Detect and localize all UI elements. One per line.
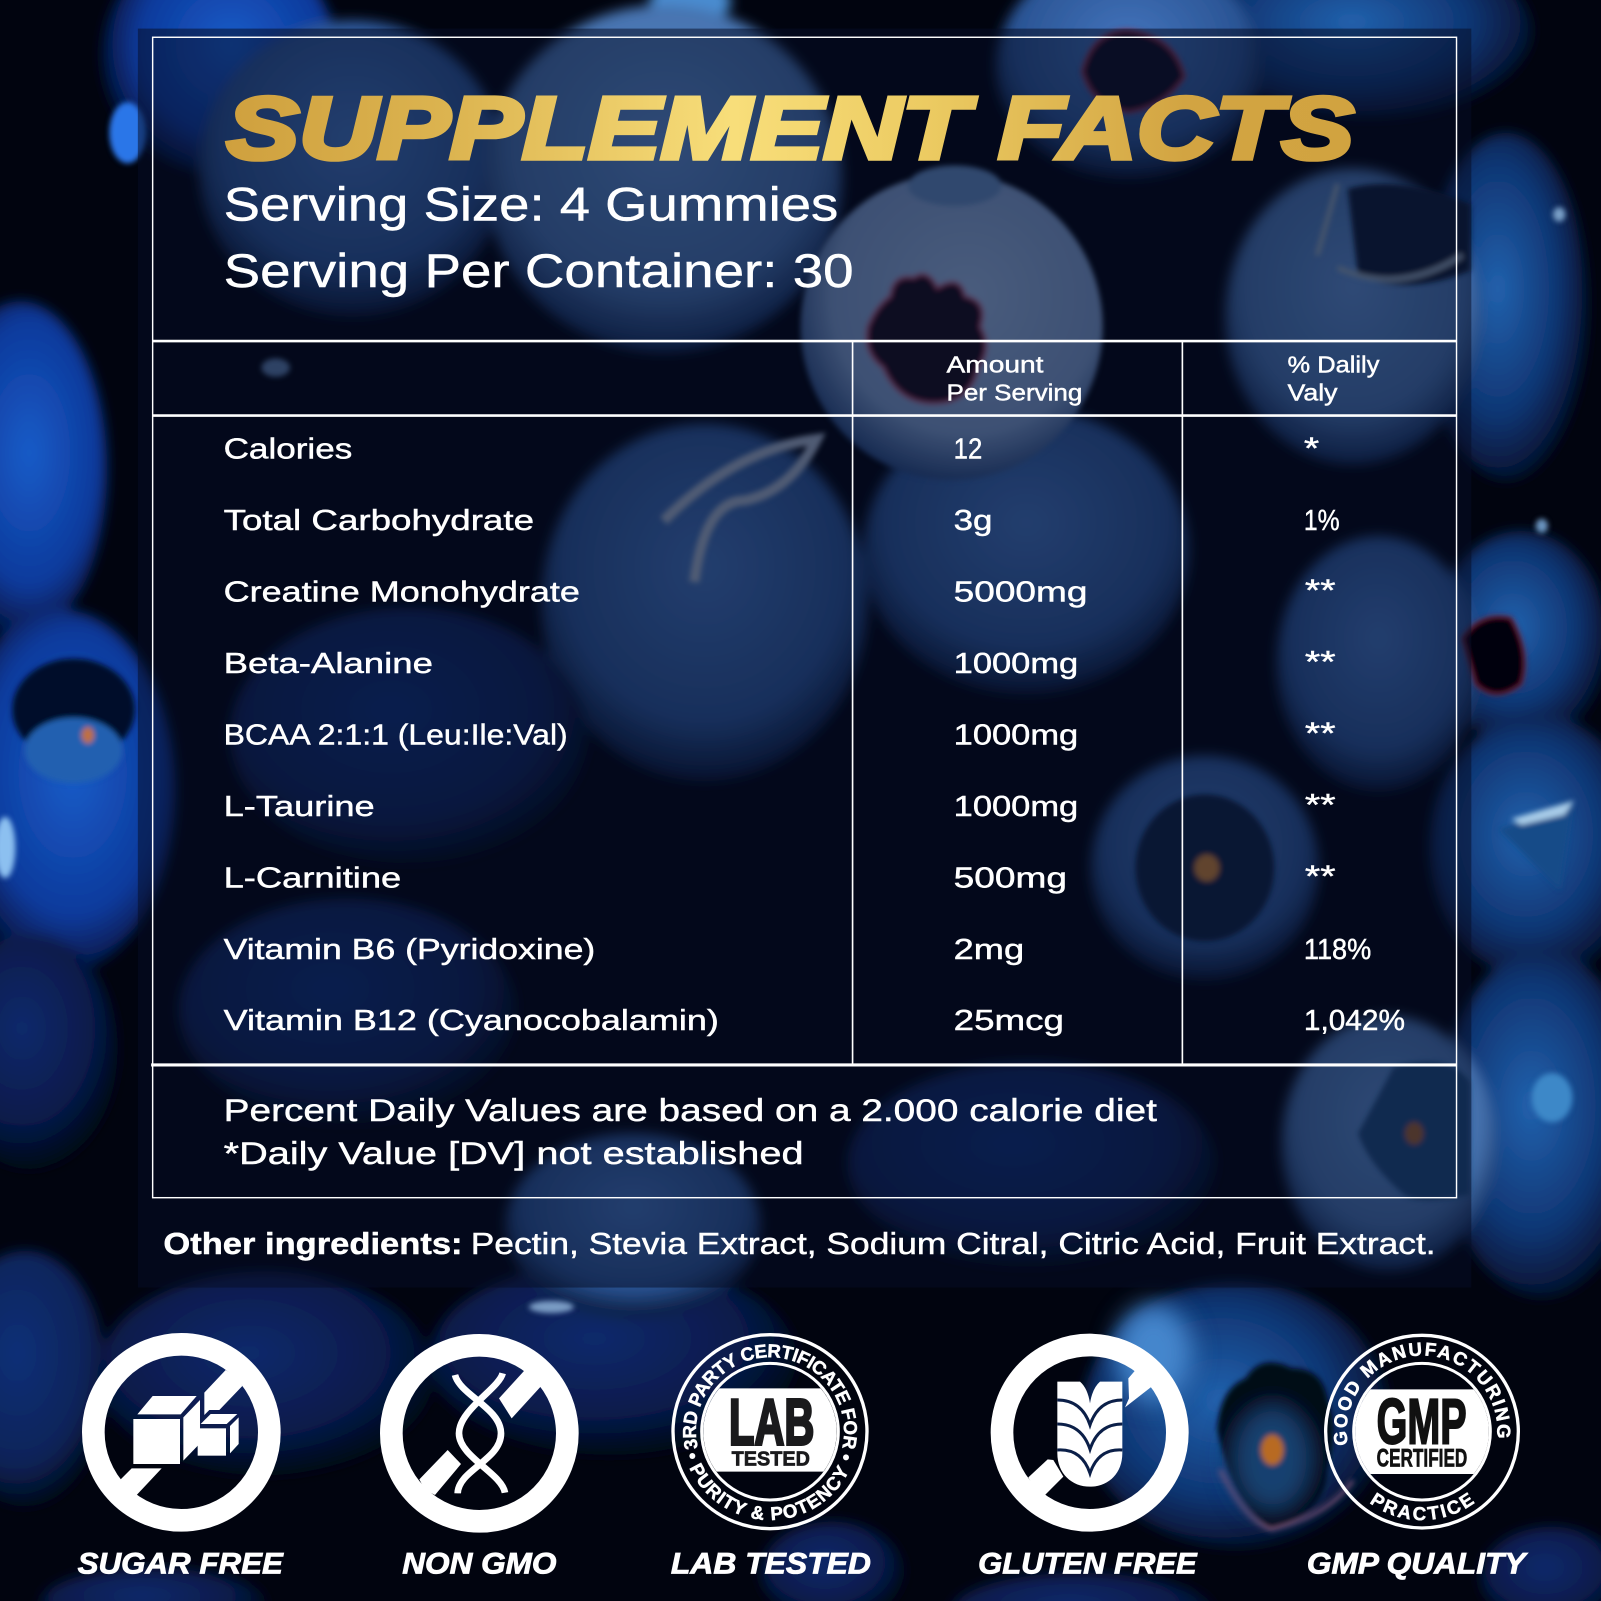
icon: lab tested badge — [671, 1333, 869, 1530]
amounts per serving: 1000mg — [954, 719, 1078, 751]
footnotes — [224, 1092, 1157, 1171]
percent daily values: ** — [1305, 573, 1336, 607]
amounts per serving: 5000mg — [954, 576, 1087, 608]
icon: sugar free — [93, 1344, 269, 1520]
icon: gmp quality badge: PRACTICE — [1370, 1492, 1475, 1520]
icon: gmp quality badge: CERTIFIED — [1377, 1445, 1467, 1473]
percent daily values — [1304, 431, 1405, 1037]
amounts per serving: 3g — [954, 505, 992, 537]
table header: Valy — [1288, 379, 1338, 405]
amounts per serving: 1000mg — [954, 648, 1078, 680]
nutrient names: L-Taurine — [224, 791, 375, 823]
nutrient names: BCAA 2:1:1 (Leu:Ile:Val) — [224, 719, 568, 751]
table header: Amount — [947, 352, 1044, 378]
percent daily values: ** — [1305, 859, 1336, 893]
nutrient names: Creatine Monohydrate — [224, 576, 580, 608]
icon labels: GMP QUALITY — [1307, 1547, 1528, 1580]
percent daily values: 1% — [1304, 505, 1340, 537]
icon labels — [78, 1547, 1528, 1580]
amounts per serving — [954, 433, 1087, 1037]
nutrient names: Vitamin B6 (Pyridoxine) — [224, 934, 595, 966]
percent daily values: * — [1304, 431, 1319, 465]
icon: lab tested badge: LAB — [729, 1385, 814, 1458]
other ingredients — [163, 1227, 1436, 1261]
nutrient names: Vitamin B12 (Cyanocobalamin) — [224, 1005, 719, 1037]
title: SUPPLEMENT FACTS — [227, 79, 1354, 177]
icon labels: SUGAR FREE — [78, 1547, 284, 1580]
amounts per serving: 25mcg — [954, 1005, 1064, 1037]
table header: Per Serving — [947, 379, 1082, 405]
icon labels: GLUTEN FREE — [978, 1547, 1198, 1580]
icon: lab tested badge: TESTED — [732, 1448, 810, 1471]
table header — [947, 352, 1380, 405]
other ingredients: Other ingredients: — [163, 1227, 463, 1261]
amounts per serving: 2mg — [954, 934, 1024, 966]
percent daily values: 118% — [1304, 934, 1371, 966]
amounts per serving: 1000mg — [954, 791, 1078, 823]
nutrient names: L-Carnitine — [224, 862, 401, 894]
footnotes: *Daily Value [DV] not established — [224, 1135, 804, 1171]
serving info — [224, 178, 854, 297]
icon labels: LAB TESTED — [671, 1547, 871, 1580]
serving info: Serving Size: 4 Gummies — [224, 178, 838, 231]
icon: lab tested badge: 3RD PARTY CERTIFICATE FOR — [682, 1344, 858, 1450]
icon: gmp quality badge — [1324, 1334, 1520, 1530]
icon labels: NON GMO — [402, 1547, 556, 1580]
nutrient names: Beta-Alanine — [224, 648, 433, 680]
nutrient names: Total Carbohydrate — [224, 505, 534, 537]
panel: supplement facts overlay — [138, 29, 1471, 1288]
percent daily values: 1,042% — [1304, 1005, 1405, 1037]
icon: gmp quality badge: GOOD MANUFACTURING — [1334, 1342, 1511, 1446]
nutrient names: Calories — [224, 433, 352, 465]
icon: gmp quality badge: GMP — [1377, 1385, 1467, 1457]
nutrient names — [224, 433, 719, 1037]
percent daily values: ** — [1305, 645, 1336, 679]
icon: non gmo — [391, 1345, 567, 1521]
table frame and grid lines — [151, 37, 1457, 1198]
icon: lab tested badge: PURITY & POTENCY — [689, 1462, 848, 1520]
amounts per serving: 500mg — [954, 862, 1067, 894]
icon: gluten free — [1002, 1345, 1177, 1520]
footnotes: Percent Daily Values are based on a 2.000 calorie diet — [224, 1092, 1157, 1128]
serving info: Serving Per Container: 30 — [224, 244, 854, 297]
percent daily values: ** — [1305, 716, 1336, 750]
table header: % Dalily — [1288, 352, 1380, 378]
other ingredients: Pectin, Stevia Extract, Sodium Citral, Citric Acid, Fruit Extract. — [471, 1227, 1436, 1261]
percent daily values: ** — [1305, 788, 1336, 822]
amounts per serving: 12 — [954, 433, 982, 465]
